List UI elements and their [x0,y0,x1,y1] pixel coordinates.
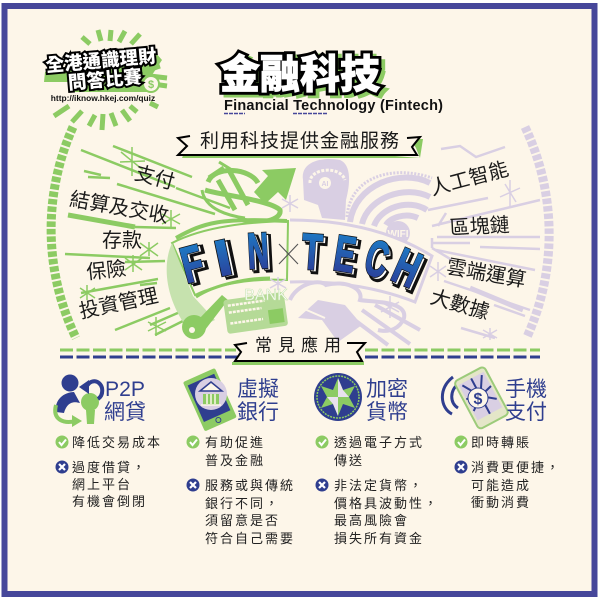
arrow [254,168,296,204]
right labels: 雲端運算 [445,255,528,292]
pros: 有助促進 [205,435,265,450]
FIN TECH lettering: C [359,229,395,289]
sparkle between panels [270,277,286,290]
FIN TECH lettering: E [330,224,360,283]
icon: cloud and data [290,282,420,345]
badge coin bulb: $ [148,79,154,91]
FIN TECH lettering: N [250,225,274,282]
FIN TECH lettering: E [333,226,362,285]
ribbon: banner top [178,130,423,158]
heading: 虛擬 [237,378,279,401]
icon: phone with bank [183,368,237,431]
FIN TECH lettering: I [210,229,237,287]
subtitle: Financial Technology (Fintech) [224,98,443,114]
cons: 消費更便捷， [471,460,561,475]
FIN TECH lettering: H [388,242,432,303]
panel: virtual bank: 銀行 [237,401,279,424]
FIN TECH lettering: H [385,238,429,298]
pros: 透過電子方式 [334,435,424,450]
icon: P2P people [55,374,102,427]
FIN TECH lettering: E [330,224,360,283]
badge heading line 1: 全港通識理財 [45,45,158,76]
panel: P2P [55,374,162,509]
pros [316,435,424,468]
FIN TECH lettering: I [215,231,242,289]
pros: 普及金融 [205,453,265,468]
FIN TECH lettering: H [386,241,431,301]
panel: cryptocurrency: 貨幣 [366,401,408,424]
cons: 非法定貨幣， [334,478,424,493]
cons [454,460,561,510]
cons: 銀行不同， [205,496,280,511]
FIN TECH lettering: T [303,226,327,282]
FIN TECH lettering: N [246,222,270,280]
cons: 須留意是否 [205,513,280,528]
FIN TECH lettering: F [180,236,215,296]
FIN TECH lettering: F [175,235,210,294]
right labels: 區塊鏈 [449,213,510,240]
ribbon text: 利用科技提供金融服務 [200,130,400,152]
cons: 價格具波動性， [334,496,439,511]
pros: 傳送 [334,453,364,468]
cons [56,460,147,509]
right labels: 大數據 [428,285,492,324]
right labels: 人工智能 [428,157,511,200]
icon: dollar sign and arrow [202,162,296,222]
outer arc: right lavender [525,127,549,337]
badge rays [54,30,167,130]
heading: P2P [105,378,145,401]
ribbon: common applications [232,335,365,364]
right sparkles [282,180,520,340]
icon: key [182,295,228,339]
cons: 衝動消費 [471,495,531,510]
panel: mobile payment: 支付 [505,401,547,424]
cons: 過度借貸， [72,460,147,475]
right speed lines [428,146,540,338]
title: 金融科技 [220,53,380,97]
icon: crypto coin [314,373,362,421]
left sparkles [80,147,180,336]
panel: virtual bank [183,368,295,546]
right labels [428,157,528,324]
title: 金融科技 [224,56,384,100]
panel: TECH background [290,220,432,302]
badge: quiz competition [44,30,167,130]
panel: cryptocurrency [314,373,439,546]
cons: 網上平台 [72,477,132,492]
heading: 手機 [505,378,547,401]
cons: 損失所有資金 [334,531,424,546]
icon: phone payment: $ [474,391,483,408]
FIN TECH lettering: C [359,229,395,289]
panel: FIN background [167,220,288,332]
badge URL: http://iknow.hkej.com/quiz [51,93,155,103]
FIN TECH lettering: C [361,232,396,291]
title: 金融科技 [220,53,380,97]
cons [316,478,439,546]
pros: 降低交易成本 [72,435,162,450]
left labels: 結算及交收 [68,188,170,228]
left labels: 支付 [132,161,177,194]
FIN TECH lettering: E [334,228,364,287]
cons: 符合自己需要 [205,531,295,546]
left labels: 投資管理 [77,284,160,323]
left speed lines [65,146,230,335]
FIN TECH lettering: F [178,236,213,296]
outer arc: left green [51,127,76,338]
icon: AI head: AI [322,181,329,188]
left labels: 存款 [102,229,142,252]
FIN TECH lettering: T [300,224,324,280]
FIN TECH lettering: T [304,227,328,284]
FIN TECH lettering [175,222,433,303]
FIN TECH lettering: N [248,224,272,281]
left labels [68,161,177,323]
cons: 可能造成 [471,478,531,493]
heading: 加密 [366,378,408,401]
label: BANK: BANK [244,287,288,304]
cons [186,478,295,546]
FIN TECH lettering: N [246,222,270,280]
FIN TECH lettering: I [214,231,240,289]
panel: P2P: 網貸 [104,401,146,424]
left labels: 保險 [85,257,127,284]
FIN TECH lettering: C [362,233,397,293]
pros: 即時轉賬 [471,435,531,450]
divider dashes [60,350,540,357]
cons: 服務或與傳統 [205,478,295,493]
icon: phone payment [442,366,509,430]
FIN TECH lettering: H [385,238,429,298]
icon: bank card [223,292,288,334]
ribbon text: 常見應用 [255,335,347,355]
cons: 最高風險會 [334,513,409,528]
FIN TECH lettering: T [300,224,324,280]
pros [186,435,265,468]
label: WIFI: WIFI [387,229,409,240]
FIN TECH lettering: I [210,229,237,287]
FIN TECH lettering: F [175,235,210,294]
cons: 有機會倒閉 [72,494,147,509]
multiply sign [279,244,298,264]
badge green brush [44,52,162,92]
icon: AI head [303,159,349,220]
icon: wifi arcs [347,173,432,245]
panel: mobile payment [442,366,561,510]
badge heading line 2: 問答比賽 [67,66,143,93]
wifi label [386,221,410,245]
